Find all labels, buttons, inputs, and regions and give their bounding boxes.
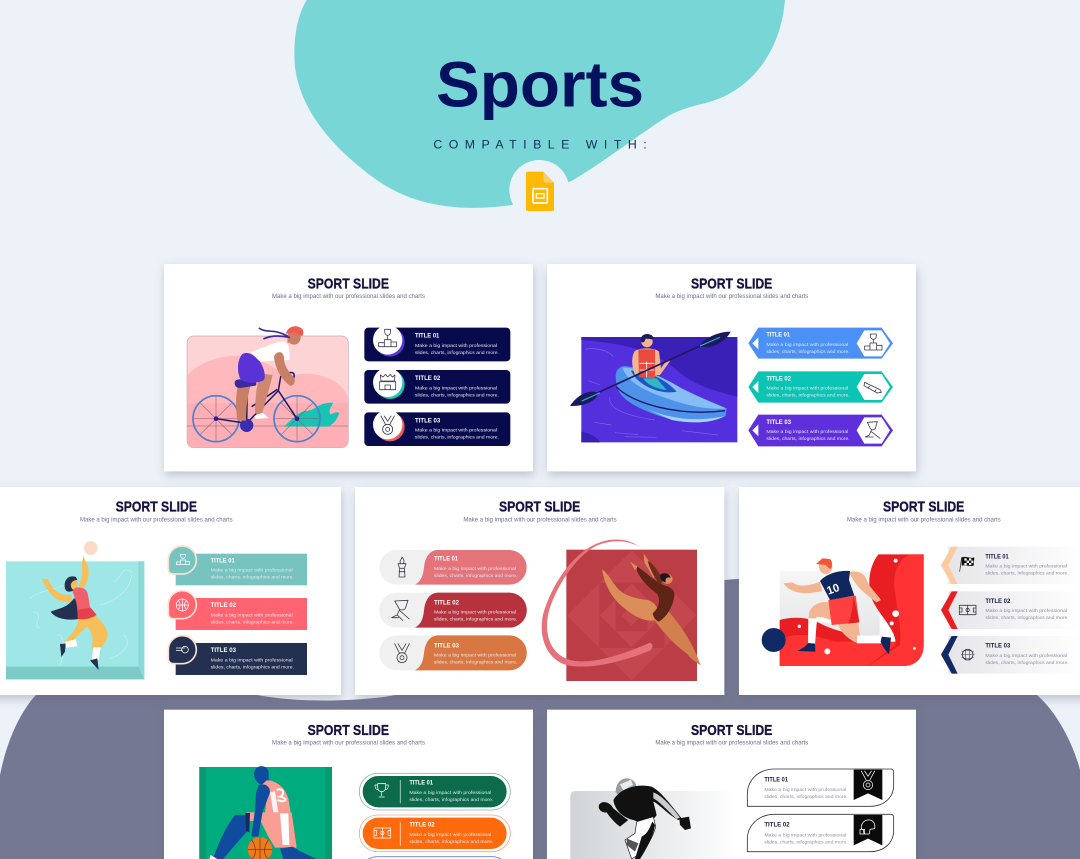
card 01: TITLE 01 [985, 554, 1009, 560]
card 02 [747, 814, 894, 852]
card 01 [747, 769, 894, 806]
card 02: TITLE 02 [211, 603, 237, 609]
icon: basketball [176, 599, 188, 611]
card 01: Make a big impact with professional [764, 787, 846, 793]
icon: trophy [865, 422, 880, 438]
icon: medal [395, 644, 409, 663]
card 02: slides, charts, infographics and more. [434, 617, 517, 623]
icon: whistle [176, 646, 188, 653]
card 03: Make a big impact with professional [434, 653, 516, 659]
panel: slide soccer [739, 487, 1080, 695]
card 03 outline [359, 857, 510, 859]
card 02: slides, charts, infographics and more. [415, 392, 499, 398]
card 03: slides, charts, infographics and more. [415, 435, 499, 441]
card 02: Make a big impact with professional [211, 612, 293, 618]
icon: checkered flag [960, 557, 974, 572]
card 01: TITLE 01 [415, 334, 440, 340]
card 02: slides, charts, infographics and more. [766, 393, 850, 399]
card 01: Make a big impact with professional [415, 343, 497, 349]
card 01 [379, 550, 527, 585]
card 03: TITLE 03 [985, 644, 1011, 650]
card 03: slides, charts, infographics and more. [434, 660, 517, 666]
icon: medal [861, 771, 875, 790]
panel: slide cycling [164, 264, 533, 471]
icon: pitch [959, 605, 976, 615]
heading: SPORT SLIDE [691, 723, 772, 739]
card 02: slides, charts, infographics and more. [211, 619, 294, 625]
card 03 [379, 635, 527, 670]
card 02 [941, 591, 1080, 629]
card 02: Make a big impact with professional [409, 832, 491, 838]
card 01: Make a big impact with professional [409, 790, 491, 796]
icon: pitch [374, 828, 391, 838]
card 02: Make a big impact with professional [766, 386, 848, 392]
illustration: kayaker [570, 332, 737, 442]
heading: SPORT SLIDE [499, 500, 580, 516]
card 01: slides, charts, infographics and more. [434, 573, 517, 579]
card 03: slides, charts, infographics and more. [766, 436, 850, 442]
card 01 [941, 547, 1080, 584]
icon: trophies [380, 374, 396, 390]
card 03: TITLE 03 [434, 643, 460, 649]
subheading: Make a big impact with our professional slides and charts [272, 294, 425, 300]
card 02: TITLE 02 [766, 377, 792, 383]
illustration: soccer player: 10 [825, 582, 841, 598]
icon: net ball [961, 649, 974, 660]
card 03 [941, 636, 1080, 674]
card 01: Make a big impact with professional [766, 342, 848, 348]
subtitle: COMPATIBLE WITH: [433, 137, 647, 151]
card 03 [364, 410, 510, 446]
card 01 [748, 328, 893, 359]
card 02 [748, 371, 893, 403]
heading: SPORT SLIDE [308, 723, 389, 739]
heading: SPORT SLIDE [308, 277, 389, 293]
card 03: TITLE 03 [211, 648, 237, 654]
icon cutout circle [509, 160, 569, 220]
subheading: Make a big impact with our professional slides and charts [655, 741, 808, 747]
card 01: TITLE 01 [766, 333, 791, 339]
card 02: TITLE 02 [434, 600, 460, 606]
card 02: slides, charts, infographics and more. [764, 839, 848, 845]
card 01: slides, charts, infographics and more. [985, 570, 1069, 576]
icon: podium [865, 334, 882, 350]
illustration: basketball player [199, 766, 332, 859]
panel: slide kayak [547, 264, 916, 471]
panel: slide volleyball [0, 487, 341, 695]
card 03: Make a big impact with professional [766, 429, 848, 435]
icon: skate [864, 382, 881, 393]
card 01 [359, 773, 510, 810]
icon: helmet [860, 820, 875, 834]
card 03 [748, 415, 893, 446]
card 01: slides, charts, infographics and more. [764, 794, 848, 800]
card 01: slides, charts, infographics and more. [415, 350, 499, 356]
subheading: Make a big impact with our professional slides and charts [655, 294, 808, 300]
subheading: Make a big impact with our professional slides and charts [463, 517, 617, 523]
card 01: Make a big impact with professional [211, 568, 293, 574]
card 02: TITLE 02 [415, 376, 441, 382]
card 02 [359, 815, 510, 852]
card 02: Make a big impact with professional [415, 385, 497, 391]
card 01: TITLE 01 [409, 780, 434, 786]
card 01 [168, 546, 307, 585]
card 02: Make a big impact with professional [985, 608, 1067, 614]
card 02: slides, charts, infographics and more. [409, 839, 493, 845]
heading: SPORT SLIDE [883, 500, 964, 516]
card 02: slides, charts, infographics and more. [985, 615, 1069, 621]
panel: slide basketball [164, 710, 533, 859]
card 01: TITLE 01 [211, 558, 235, 564]
card 03: TITLE 03 [415, 418, 441, 424]
icon: podium [379, 329, 397, 347]
card 01: TITLE 01 [764, 777, 789, 783]
card 02: TITLE 02 [985, 599, 1011, 605]
subheading: Make a big impact with our professional slides and charts [847, 517, 1001, 523]
main title: Sports [436, 49, 644, 121]
illustration: soccer player [762, 554, 924, 666]
panel: slide american football [547, 710, 916, 859]
illustration: american football player [570, 778, 737, 859]
icon: medal [381, 416, 394, 434]
card 03: Make a big impact with professional [985, 653, 1067, 659]
card 03: TITLE 03 [766, 420, 792, 426]
dark background blob [0, 579, 1080, 859]
card 01 [364, 325, 510, 361]
icon: google slides [526, 172, 554, 211]
heading: SPORT SLIDE [116, 500, 197, 516]
card 02: Make a big impact with professional [434, 610, 516, 616]
card 02 [168, 591, 307, 630]
card 03: Make a big impact with professional [211, 657, 293, 663]
icon: trophy [375, 784, 388, 797]
card 02: TITLE 02 [764, 823, 790, 829]
header [294, 0, 785, 220]
subheading: Make a big impact with our professional slides and charts [272, 741, 425, 747]
card 03: Make a big impact with professional [415, 428, 497, 434]
icon: torch [398, 557, 406, 577]
card 01: Make a big impact with professional [985, 563, 1067, 569]
subheading: Make a big impact with our professional slides and charts [80, 517, 233, 523]
panel: slide gymnastics [355, 487, 724, 695]
card 01: Make a big impact with professional [434, 566, 516, 572]
teal blob [294, 0, 785, 208]
card 03: slides, charts, infographics and more. [985, 660, 1069, 666]
illustration: rhythmic gymnast [542, 539, 701, 681]
card 02 [379, 593, 527, 628]
illustration: volleyball player [6, 541, 144, 679]
card 03: slides, charts, infographics and more. [211, 664, 294, 670]
card 02 [364, 368, 510, 404]
card 02: TITLE 02 [409, 822, 435, 828]
card 03 [168, 636, 307, 675]
illustration: cyclist [187, 326, 348, 448]
card 02: Make a big impact with professional [764, 832, 846, 838]
card 01: TITLE 01 [434, 556, 459, 562]
card 01: slides, charts, infographics and more. [766, 349, 850, 355]
heading: SPORT SLIDE [691, 277, 772, 293]
card 01: slides, charts, infographics and more. [409, 797, 493, 803]
icon: trophy [392, 600, 409, 620]
icon: podium [176, 554, 190, 565]
card 01: slides, charts, infographics and more. [211, 575, 294, 581]
